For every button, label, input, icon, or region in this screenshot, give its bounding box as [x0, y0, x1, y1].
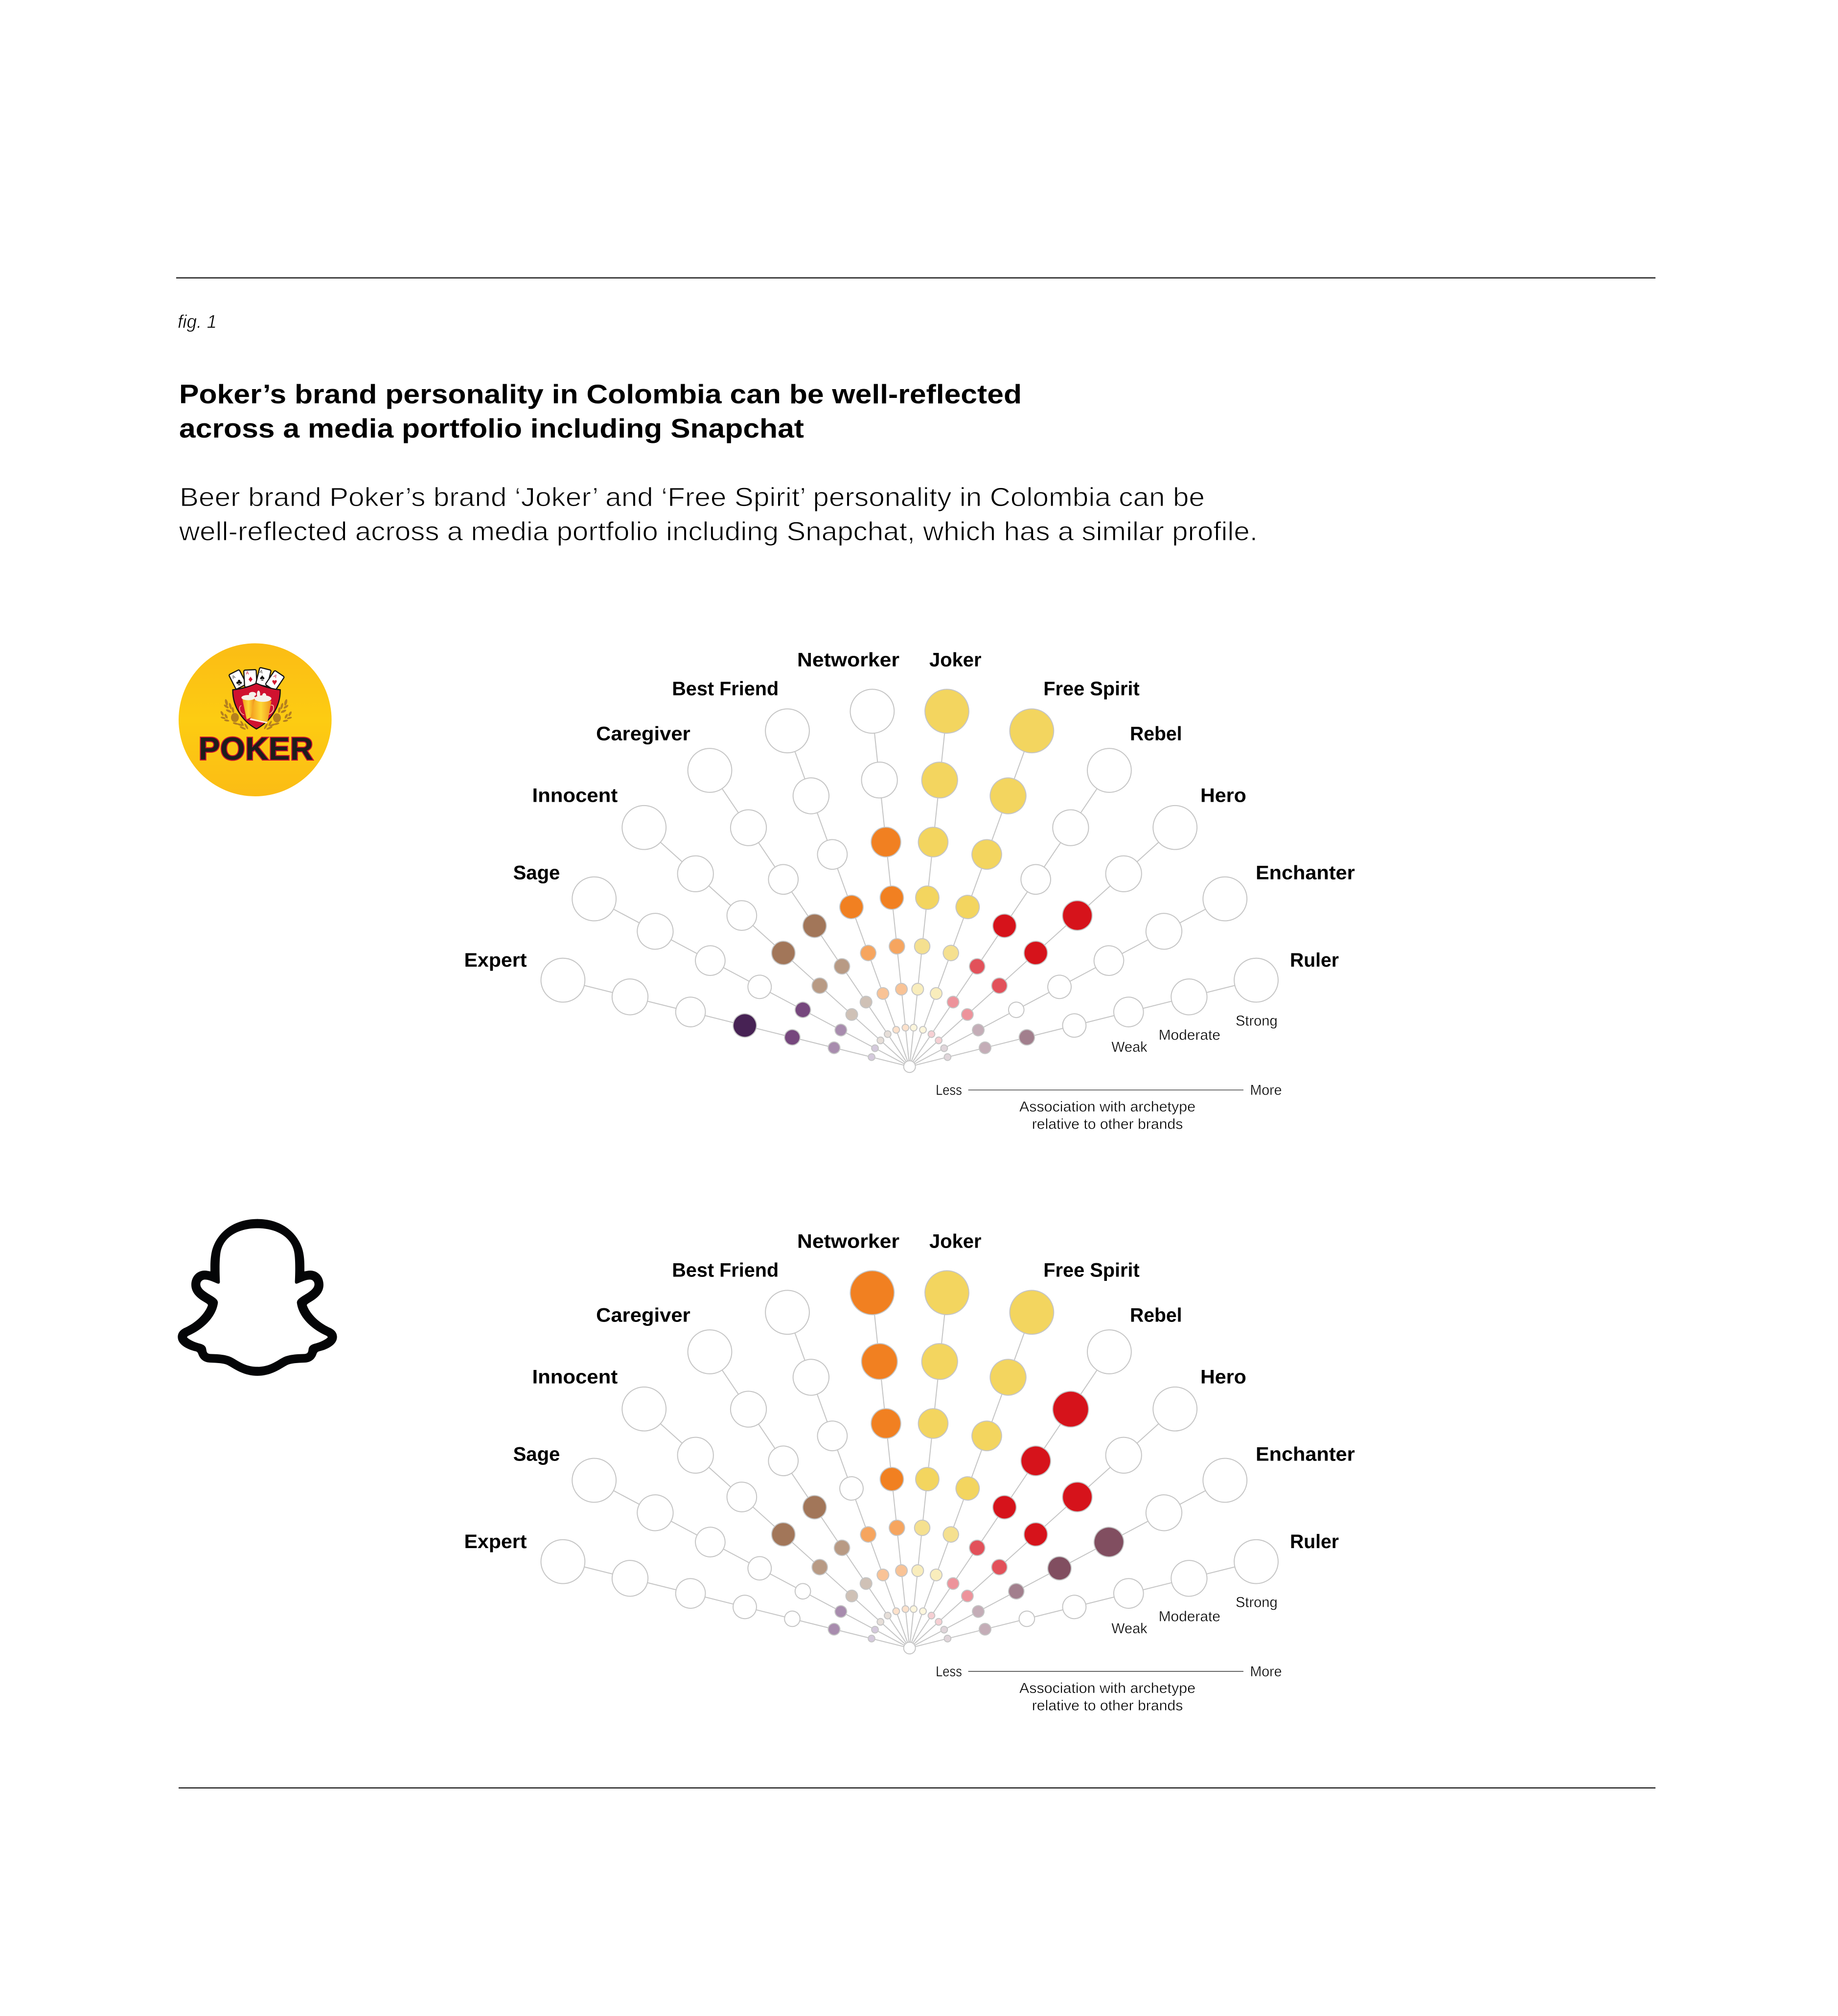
icon: Poker beer logo: ♠ [260, 672, 265, 683]
archetype labels: Sage [513, 862, 560, 883]
spokes and association circles [536, 687, 1283, 1088]
icon: Poker beer logo: A [273, 673, 278, 679]
spoke: Joker [888, 1269, 971, 1650]
spoke: Innocent [613, 1378, 924, 1665]
legend: strength and association scale [936, 1013, 1282, 1133]
legend: strength and association scale: Association with archetype [1019, 1099, 1195, 1115]
spoke: Ruler [904, 953, 1283, 1088]
spoke: Rebel [891, 1321, 1140, 1660]
spokes and association circles [536, 1269, 1283, 1669]
spoke: Caregiver [679, 740, 928, 1079]
archetype labels: Networker [797, 1231, 899, 1252]
legend: strength and association scale: relative to other brands [1032, 1698, 1183, 1714]
icon: Poker beer logo: ♣ [236, 677, 242, 687]
heading: across a media portfolio including Snapchat [179, 413, 804, 443]
chart: Snapchat archetype fan [464, 1231, 1355, 1714]
archetype labels: Rebel [1130, 723, 1182, 744]
spoke: Caregiver [679, 1321, 928, 1660]
legend: strength and association scale: Weak [1111, 1621, 1148, 1637]
legend: strength and association scale: Strong [1236, 1013, 1278, 1029]
archetype labels: Best Friend [672, 678, 779, 700]
archetype labels: Innocent [532, 1366, 618, 1388]
spoke: Free Spirit [889, 703, 1060, 1074]
hub circle [904, 1061, 916, 1072]
archetype labels: Sage [513, 1443, 560, 1465]
legend: strength and association scale: Association with archetype [1019, 1680, 1195, 1696]
spoke: Expert [536, 1535, 915, 1669]
spoke: Enchanter [899, 869, 1255, 1086]
archetype labels [464, 1231, 1355, 1553]
spoke: Best Friend [759, 1284, 930, 1656]
spoke: Innocent [613, 796, 924, 1083]
archetype labels: Hero [1200, 785, 1246, 806]
legend: strength and association scale: Weak [1111, 1039, 1148, 1055]
spoke: Sage [564, 869, 920, 1086]
icon: Poker beer logo: A [259, 669, 264, 674]
archetype labels: Ruler [1290, 950, 1339, 971]
heading: Poker’s brand personality in Colombia can be well-reflected [179, 379, 1022, 409]
spoke: Networker [848, 687, 931, 1069]
archetype labels: Caregiver [596, 723, 690, 744]
legend: strength and association scale: Moderate [1159, 1608, 1220, 1624]
icon: Poker beer logo: ♦ [248, 673, 253, 684]
spoke: Hero [895, 796, 1206, 1083]
legend: strength and association scale [936, 1595, 1282, 1714]
intro text: well-reflected across a media portfolio including Snapchat, which has a similar profile. [179, 517, 1258, 546]
archetype labels: Ruler [1290, 1531, 1339, 1553]
archetype labels: Innocent [532, 785, 618, 806]
legend: strength and association scale: More [1250, 1664, 1282, 1680]
icon: Poker beer logo [179, 643, 332, 796]
spoke: Joker [888, 687, 971, 1069]
spoke: Sage [564, 1451, 920, 1668]
archetype labels: Expert [464, 950, 527, 971]
legend: strength and association scale: More [1250, 1082, 1282, 1098]
spoke: Rebel [891, 740, 1140, 1079]
legend: strength and association scale: Less [936, 1082, 962, 1098]
archetype labels: Hero [1200, 1366, 1246, 1388]
spoke: Networker [848, 1269, 931, 1650]
archetype labels: Joker [929, 649, 982, 671]
icon: Snapchat ghost [178, 1219, 337, 1376]
figure number: fig. 1 [178, 312, 217, 332]
archetype labels: Joker [929, 1231, 982, 1252]
spoke: Ruler [904, 1535, 1283, 1669]
archetype labels: Expert [464, 1531, 527, 1553]
legend: strength and association scale: relative to other brands [1032, 1116, 1183, 1133]
chart: Poker archetype fan [464, 649, 1355, 1133]
archetype labels: Enchanter [1256, 862, 1355, 883]
spoke: Best Friend [759, 703, 930, 1074]
icon: Poker beer logo: A [246, 671, 249, 675]
icon: Poker beer logo: ♥ [272, 677, 277, 687]
icon: Poker beer logo: A [231, 674, 236, 680]
archetype labels: Networker [797, 649, 899, 671]
archetype labels: Rebel [1130, 1304, 1182, 1326]
archetype labels: Best Friend [672, 1260, 779, 1281]
archetype labels: Caregiver [596, 1304, 690, 1326]
legend: strength and association scale: Less [936, 1664, 962, 1680]
heading [179, 379, 1022, 443]
intro text: Beer brand Poker’s brand ‘Joker’ and ‘Free Spirit’ personality in Colombia can be [180, 483, 1205, 512]
intro text [179, 483, 1258, 546]
archetype labels [464, 649, 1355, 971]
archetype labels: Free Spirit [1043, 678, 1140, 700]
archetype labels: Free Spirit [1043, 1260, 1140, 1281]
legend: strength and association scale: Strong [1236, 1595, 1278, 1611]
spoke: Free Spirit [889, 1284, 1060, 1656]
spoke: Enchanter [899, 1451, 1255, 1668]
spoke: Hero [895, 1378, 1206, 1665]
archetype labels: Enchanter [1256, 1443, 1355, 1465]
spoke: Expert [536, 953, 915, 1088]
hub circle [904, 1642, 916, 1654]
icon: Poker beer logo: POKER [199, 731, 313, 766]
legend: strength and association scale: Moderate [1159, 1027, 1220, 1043]
